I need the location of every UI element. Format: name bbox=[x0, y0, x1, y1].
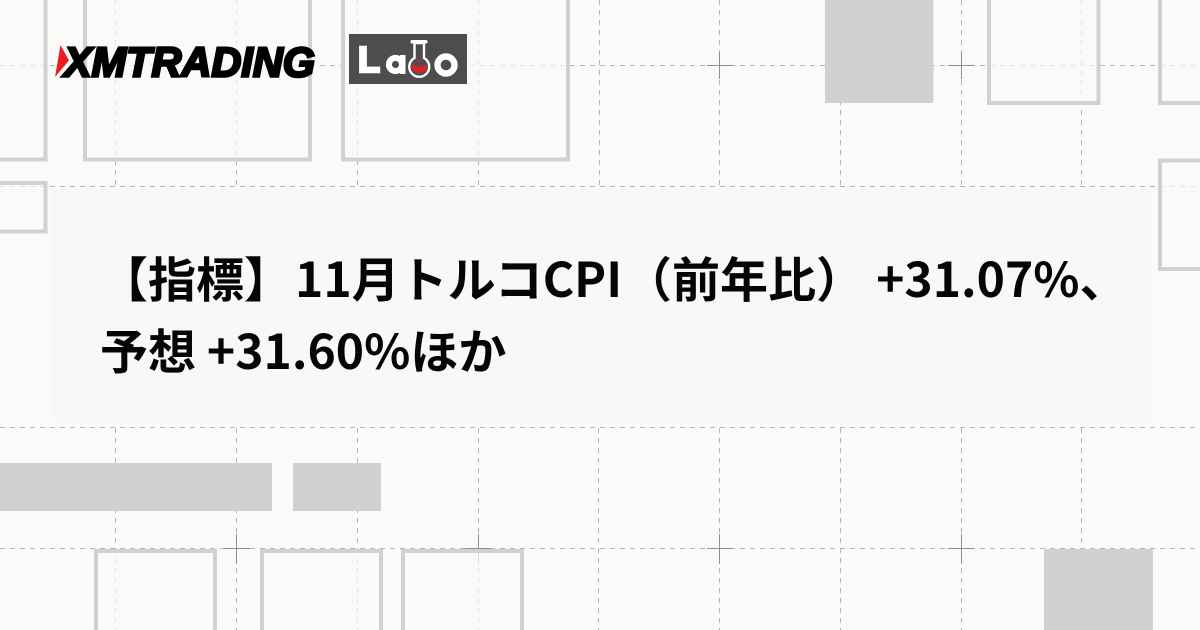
logo letter o bbox=[438, 56, 454, 74]
logo letter a bbox=[389, 55, 406, 74]
logo: Lab bbox=[349, 34, 467, 84]
title: 予想 +31.60%ほか bbox=[100, 312, 506, 382]
title: +31.07%、 bbox=[876, 241, 1128, 311]
logo letter L: L bbox=[358, 39, 380, 80]
title: 【指標】 bbox=[100, 241, 292, 311]
title: 11月トルコCPI bbox=[295, 241, 622, 311]
title: （前年比） bbox=[624, 241, 864, 311]
icon: red triangle bbox=[55, 45, 69, 77]
icon: flask bbox=[409, 40, 429, 77]
title bbox=[100, 241, 1128, 382]
logo wordmark: XMTRADING bbox=[62, 38, 315, 86]
